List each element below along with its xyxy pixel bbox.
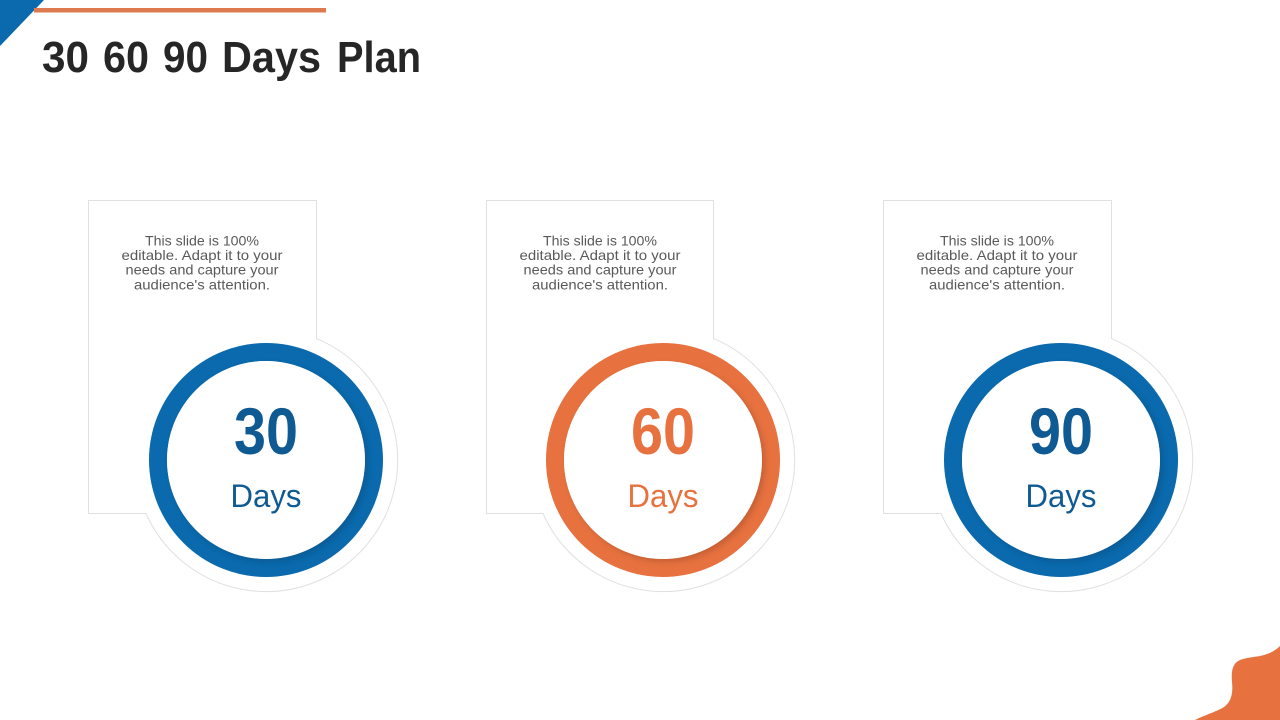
label: Days xyxy=(230,478,302,514)
ring xyxy=(158,352,374,568)
ring xyxy=(555,352,771,568)
description text: audience's attention. xyxy=(532,276,668,292)
label: Days xyxy=(628,478,698,514)
description text: needs and capture your xyxy=(920,262,1074,278)
title: 90 xyxy=(163,33,208,82)
corner blob xyxy=(1195,646,1280,720)
description text: editable. Adapt it to your xyxy=(520,247,681,263)
panel: 30 days xyxy=(88,200,398,592)
description text: This slide is 100% xyxy=(543,232,657,248)
corner triangle xyxy=(0,0,44,46)
description text: editable. Adapt it to your xyxy=(122,247,283,263)
accent line xyxy=(34,8,326,12)
title: 60 xyxy=(103,33,149,82)
description text: editable. Adapt it to your xyxy=(916,247,1078,263)
card outline xyxy=(88,200,398,592)
number: 60 xyxy=(631,394,695,468)
description text: audience's attention. xyxy=(134,276,270,292)
title: Plan xyxy=(337,33,421,82)
label: Days xyxy=(1026,478,1096,514)
description text: audience's attention. xyxy=(929,276,1065,292)
panel: 60 days xyxy=(486,200,795,592)
number: 30 xyxy=(234,394,298,468)
card outline xyxy=(884,200,1193,592)
panel: 90 days xyxy=(884,200,1193,592)
description text: needs and capture your xyxy=(524,262,677,278)
number: 90 xyxy=(1029,394,1093,468)
title: 30 xyxy=(42,33,89,82)
card outline xyxy=(486,200,795,592)
description text: needs and capture your xyxy=(126,262,279,278)
title: Days xyxy=(222,33,321,82)
ring xyxy=(953,352,1169,568)
description text: This slide is 100% xyxy=(145,232,259,248)
description text: This slide is 100% xyxy=(940,232,1054,248)
